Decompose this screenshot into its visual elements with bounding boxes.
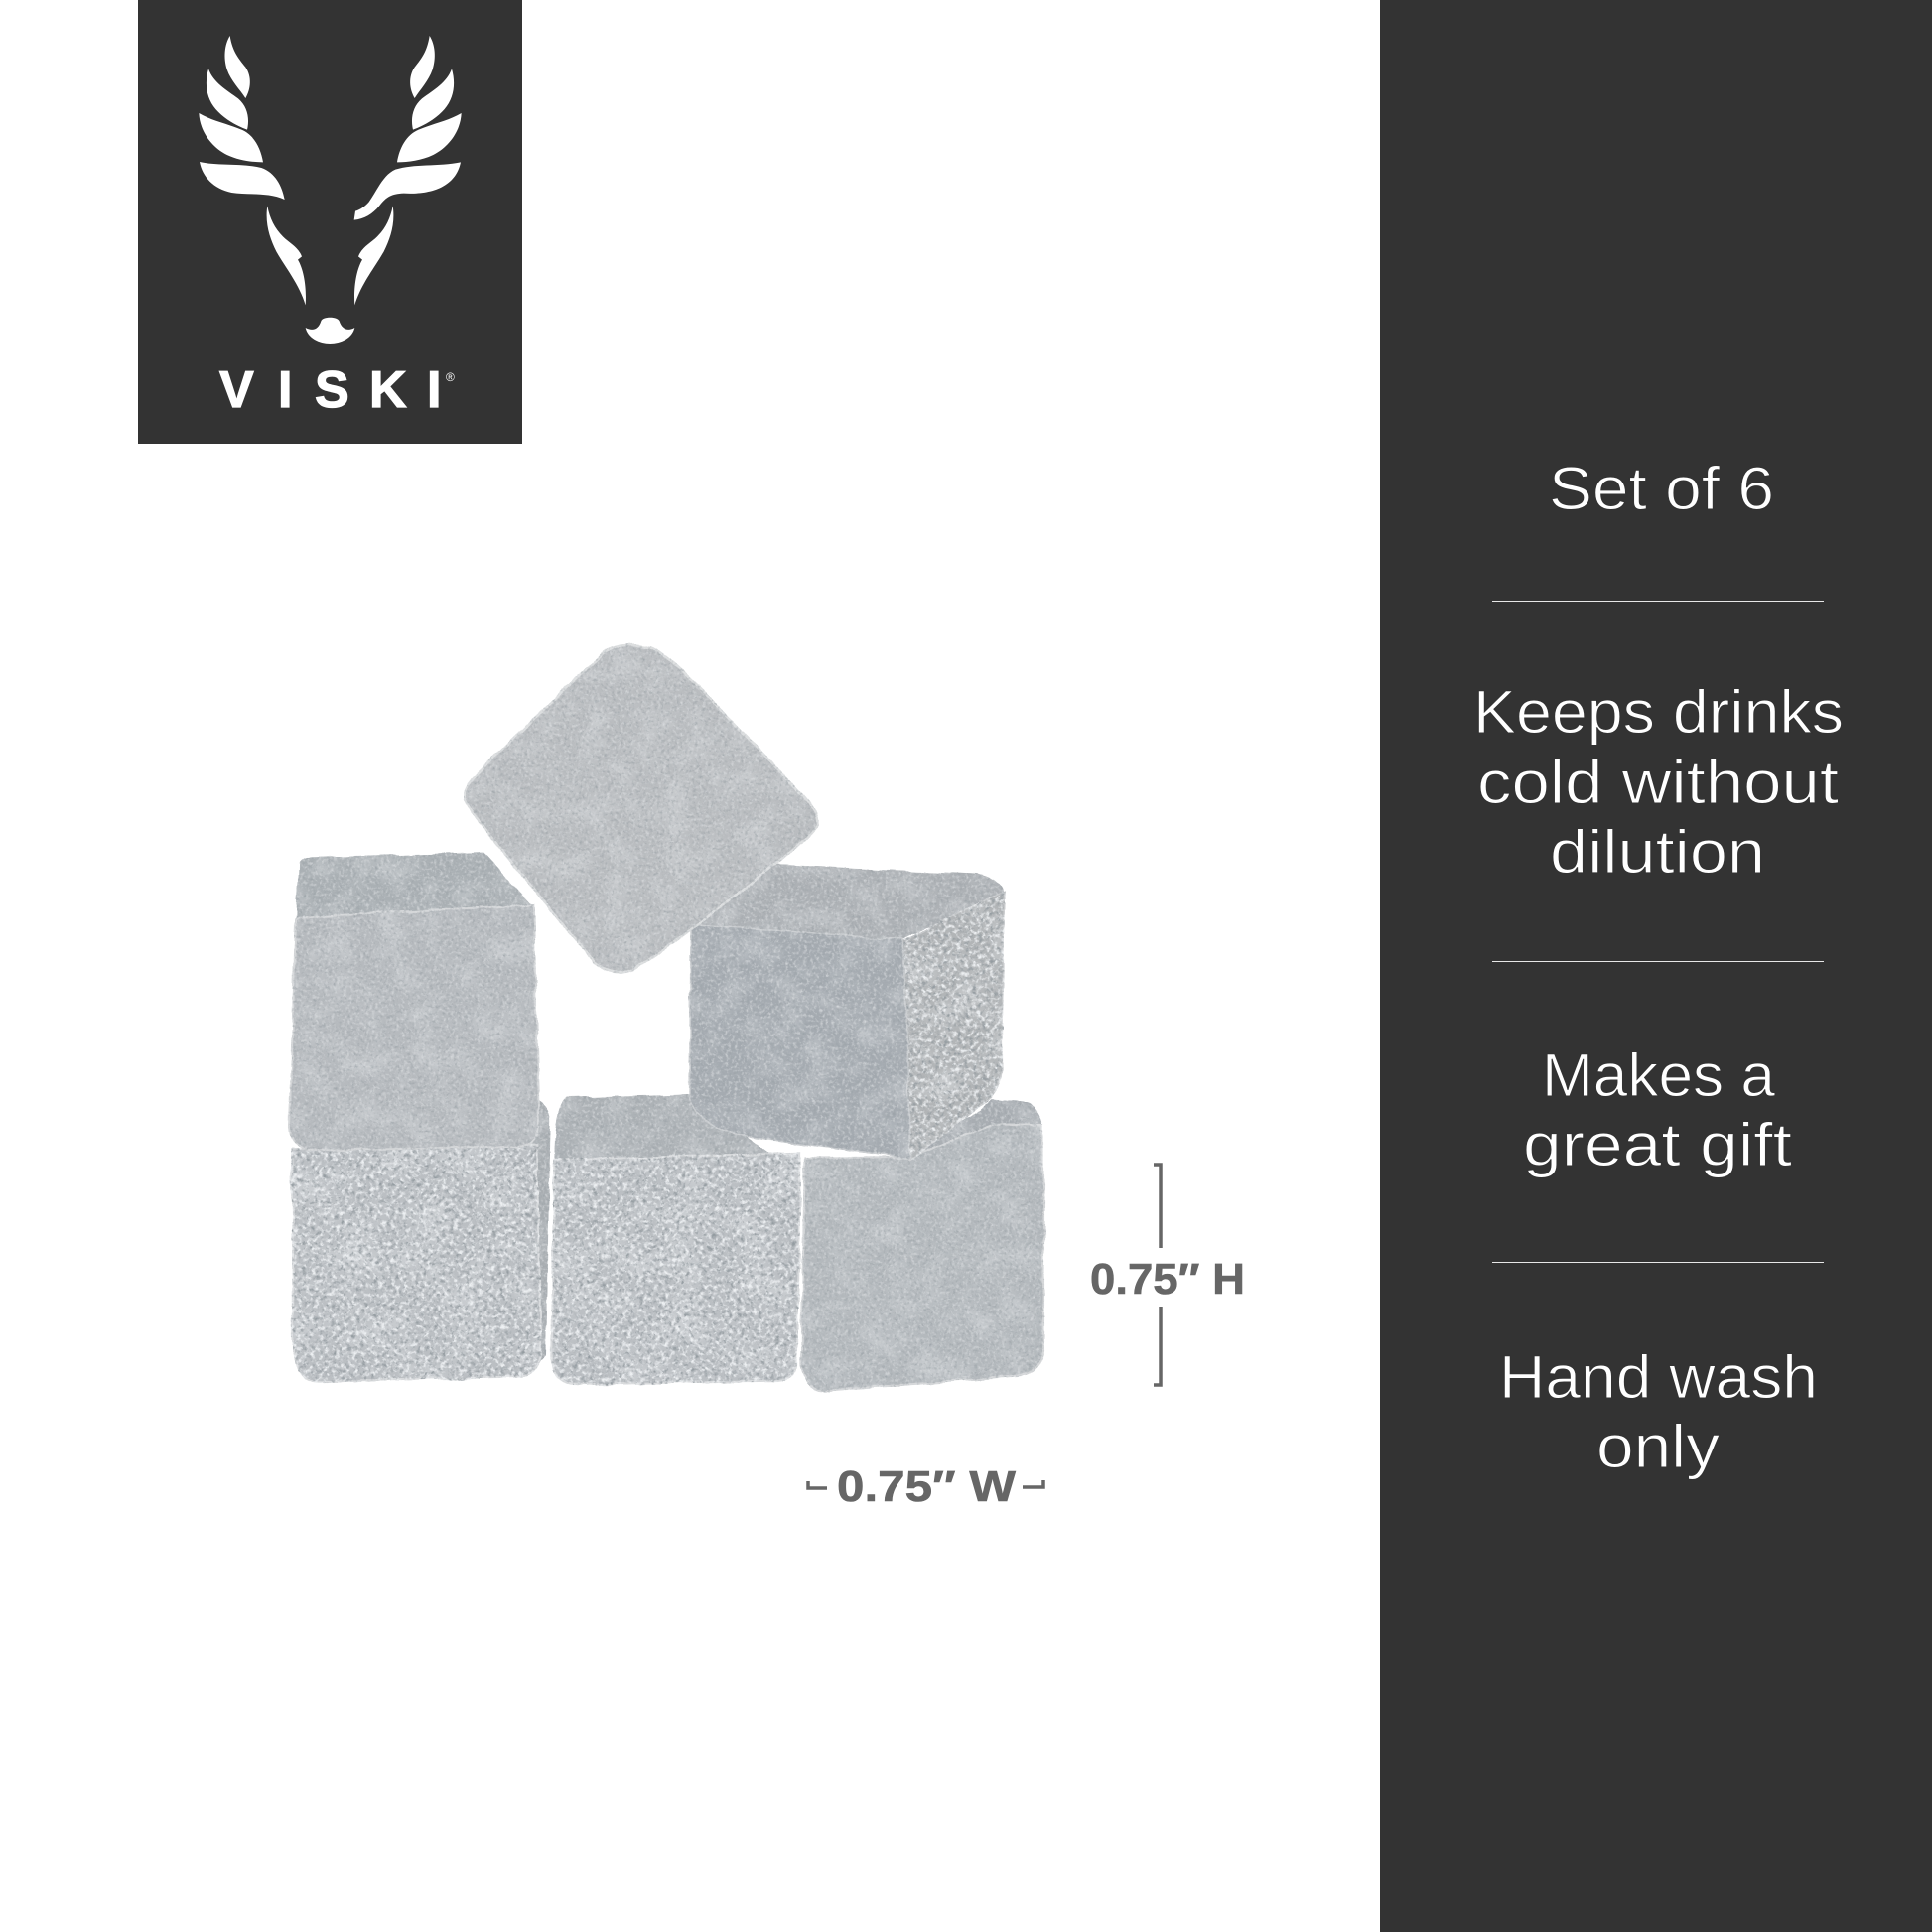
- stone: bottom right: [801, 1099, 1044, 1390]
- feature: makes a great gift: [1523, 1041, 1792, 1178]
- feature: keeps drinks cold: Keeps drinks: [1473, 678, 1844, 746]
- logo registered mark: ®: [446, 370, 455, 384]
- icon: nose: [306, 318, 354, 344]
- feature: makes a great gift: great gift: [1523, 1111, 1792, 1178]
- feature: keeps drinks cold: dilution: [1550, 818, 1765, 886]
- bracket: height bottom: [1154, 1307, 1161, 1385]
- icon: left antler: [199, 36, 306, 305]
- logo wordmark: VISKI: [219, 361, 441, 419]
- feature: set of 6: Set of 6: [1549, 455, 1774, 522]
- label: height: 0.75″ H: [1090, 1255, 1245, 1304]
- stone: bottom middle: [552, 1094, 801, 1384]
- bracket: width right: [1023, 1480, 1043, 1487]
- feature: hand wash only: [1499, 1343, 1818, 1480]
- feature: hand wash only: only: [1596, 1413, 1721, 1480]
- panel: features: [1380, 0, 1932, 1932]
- feature: keeps drinks cold: [1473, 678, 1844, 886]
- stone: upper right: [689, 861, 1004, 1160]
- icon: right antler: [354, 36, 462, 305]
- feature: keeps drinks cold: cold without: [1477, 749, 1839, 816]
- feature: hand wash only: Hand wash: [1499, 1343, 1818, 1411]
- label: width: 0.75″ W: [837, 1462, 1017, 1511]
- dimension: height: [1090, 1165, 1245, 1385]
- stone: upper left: [289, 852, 539, 1151]
- bracket: width left: [808, 1481, 827, 1488]
- panel: logo background: [138, 0, 522, 444]
- photo: stack of six stones: [289, 645, 1044, 1390]
- logo: Viski stag: [199, 36, 462, 344]
- dimension: width: [808, 1462, 1043, 1511]
- bracket: height top: [1154, 1165, 1161, 1248]
- feature: makes a great gift: Makes a: [1542, 1041, 1775, 1109]
- stone: top tilted: [465, 645, 817, 973]
- stone: bottom left: [292, 1099, 551, 1381]
